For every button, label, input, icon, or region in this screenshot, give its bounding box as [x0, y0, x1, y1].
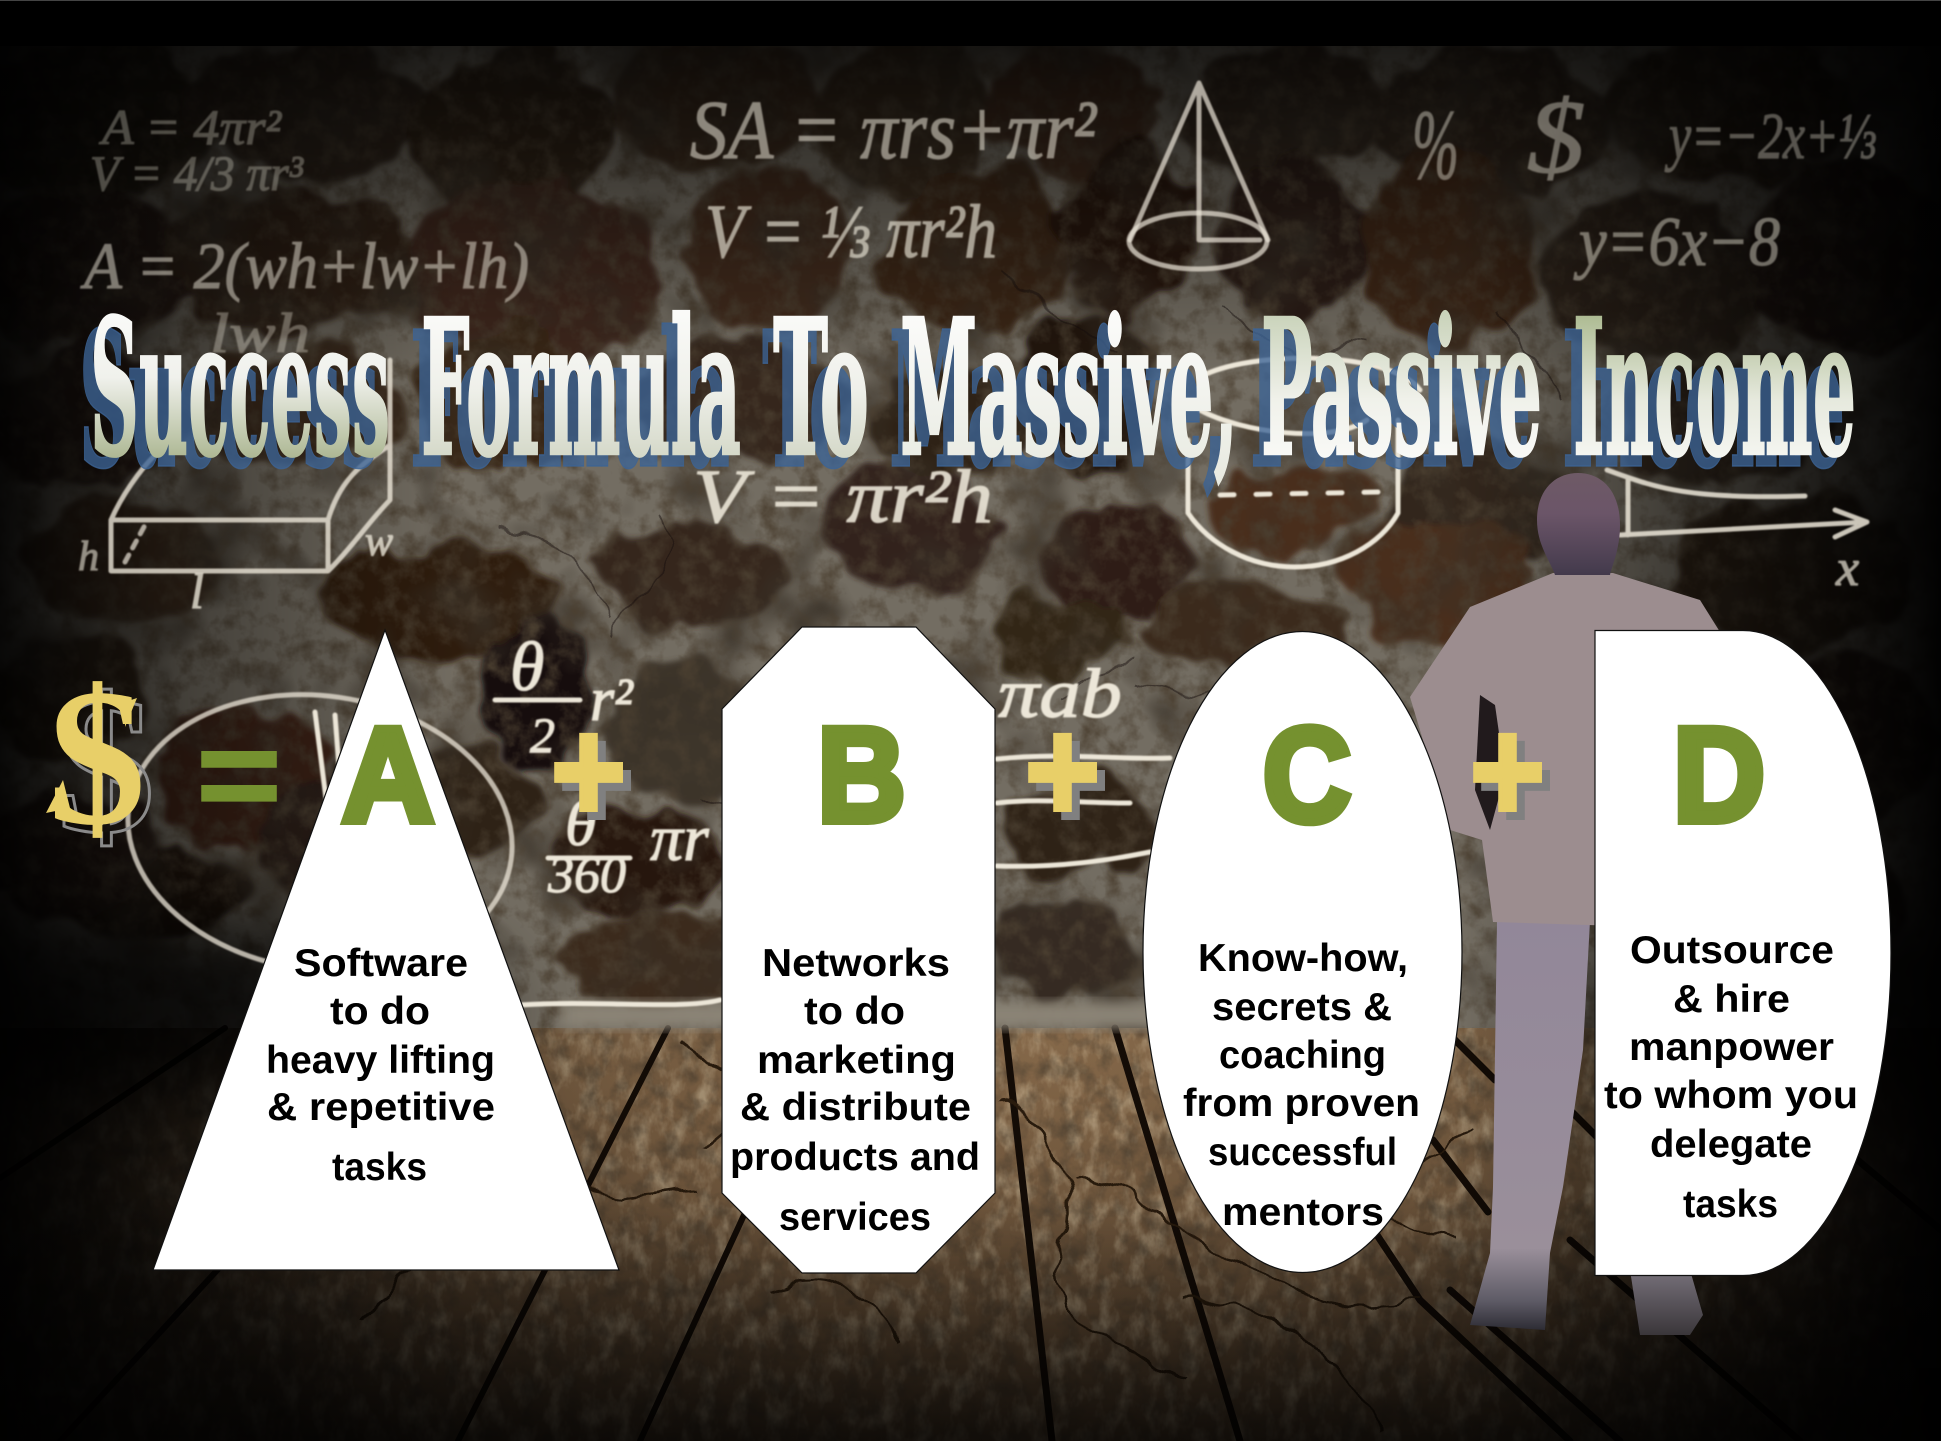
formula: theta: θ — [565, 788, 596, 859]
triangle shape — [153, 630, 619, 1270]
wall texture — [0, 46, 1941, 1036]
formula: cone area: SA = πrs+πr² — [690, 84, 1098, 177]
man: arm gap — [1475, 695, 1505, 830]
formula: cone volume: V = ⅓ πr²h — [705, 190, 997, 274]
title: Massive, — [900, 278, 1238, 499]
top black band — [0, 0, 1941, 46]
formula: r squared: r² — [590, 666, 634, 734]
formula: sphere: A = 4πr² — [99, 99, 282, 155]
wall and floor junction highlight — [560, 1002, 1180, 1028]
vignette: left — [0, 46, 460, 1441]
wooden floor — [0, 1028, 1941, 1441]
chalk shapes — [110, 83, 1867, 1005]
plus sign 2: + — [1025, 689, 1100, 852]
vignette: bottom — [0, 1200, 1941, 1441]
description B: products and — [730, 1136, 980, 1179]
floor light mottling — [0, 1028, 1941, 1441]
percent sign: % — [1412, 89, 1459, 200]
formula: sphere volume: V = 4/3 πr³ — [90, 145, 304, 201]
title shadow: Massive, — [889, 290, 1227, 511]
description C: Know-how, — [1198, 937, 1408, 980]
title shadow — [79, 290, 1845, 511]
description D: Outsource — [1630, 929, 1834, 972]
title shadow: To — [762, 290, 858, 511]
title: Formula — [421, 278, 741, 499]
wall cracks — [500, 270, 1560, 920]
description D: tasks — [1683, 1183, 1778, 1226]
formula: 360: 360 — [547, 847, 626, 904]
letter D: D — [1673, 701, 1765, 850]
formula: box volume: lwh — [210, 303, 310, 365]
axis label h: h — [78, 534, 99, 580]
man: far foot — [1630, 1270, 1703, 1335]
panel B: octagon — [722, 627, 995, 1273]
description C: from proven — [1183, 1082, 1420, 1125]
description A: & repetitive — [267, 1086, 495, 1129]
description A: tasks — [332, 1146, 427, 1189]
plus sign 2: + — [1033, 697, 1108, 860]
man: jacket — [1410, 573, 1745, 930]
title: To — [773, 278, 869, 499]
formula: fraction two: 2 — [530, 707, 555, 763]
description D — [1604, 929, 1858, 1226]
plus sign 3: + — [1478, 697, 1553, 860]
description A: Software — [294, 942, 468, 985]
formula: pi a b: πab — [998, 656, 1122, 733]
title shadow: Success — [79, 290, 379, 511]
lower-left shadow across the wall and floor seam — [0, 915, 500, 1105]
lower-right shadow across the wall and floor seam — [1600, 920, 1941, 1120]
axis label l: l — [190, 563, 204, 619]
axis label x: x — [1835, 540, 1859, 597]
description C: mentors — [1222, 1191, 1384, 1234]
equals sign: = — [197, 704, 281, 845]
ellipse shape — [1143, 632, 1462, 1272]
floor dark mottling — [0, 1028, 1941, 1441]
panel A: triangle — [153, 630, 619, 1270]
title — [90, 278, 1856, 499]
image frame — [0, 0, 1941, 2]
delay shape — [1595, 630, 1891, 1276]
description C: successful — [1208, 1131, 1397, 1174]
man: head — [1537, 473, 1620, 575]
chalk dollar sign: $ — [1527, 78, 1585, 195]
floor plank lines — [0, 1028, 1941, 1441]
description B: to do — [804, 990, 905, 1033]
description B: marketing — [757, 1039, 956, 1082]
chalk formulas and drawings — [78, 78, 1876, 1005]
vignette: top — [0, 46, 1941, 376]
panel C: ellipse — [1143, 632, 1462, 1272]
plus sign 1: + — [551, 689, 626, 852]
description C — [1183, 937, 1420, 1234]
plus sign 1: + — [559, 697, 634, 860]
plus sign 3: + — [1470, 689, 1545, 852]
wall mortar — [0, 46, 1941, 1036]
panel D: delay shape — [1595, 630, 1891, 1276]
formula: surface area: A = 2(wh+lw+lh) — [80, 230, 529, 303]
formula: theta over two: θ — [510, 629, 544, 706]
formula: cylinder volume: V = πr²h — [693, 455, 993, 539]
description D: delegate — [1650, 1123, 1812, 1166]
man: legs — [1470, 921, 1590, 1330]
formula: line two: y=6x−8 — [1574, 204, 1780, 281]
description A — [266, 942, 495, 1189]
dollar sign: $ — [48, 649, 146, 866]
floor vignette — [0, 1028, 1941, 1441]
description B: Networks — [762, 942, 950, 985]
letter C: C — [1263, 701, 1351, 850]
man in suit, seen from behind — [1410, 473, 1745, 1335]
letter A: A — [342, 701, 434, 850]
description B: services — [779, 1196, 931, 1239]
vignette: right — [1460, 46, 1941, 1441]
description A: heavy lifting — [266, 1039, 495, 1082]
title shadow: Formula — [410, 290, 730, 511]
floor cracks — [300, 1040, 1470, 1430]
formula: line one: y=−2x+⅓ — [1664, 100, 1876, 173]
wall stones — [0, 40, 1941, 1010]
octagon shape — [722, 627, 995, 1273]
letter B: B — [818, 701, 906, 850]
axis label w: w — [365, 519, 393, 565]
description B: & distribute — [740, 1086, 971, 1129]
description D: & hire — [1673, 978, 1790, 1021]
description D: manpower — [1629, 1026, 1834, 1069]
description A: to do — [330, 990, 430, 1033]
description C: coaching — [1219, 1034, 1386, 1077]
title: Success — [90, 278, 390, 499]
wall texture blotches — [0, 46, 1941, 1036]
formula: pi r: πr — [650, 802, 709, 875]
dollar sign: $ — [57, 657, 155, 874]
description B — [730, 942, 980, 1239]
description D: to whom you — [1604, 1074, 1858, 1117]
description C: secrets & — [1212, 986, 1392, 1029]
